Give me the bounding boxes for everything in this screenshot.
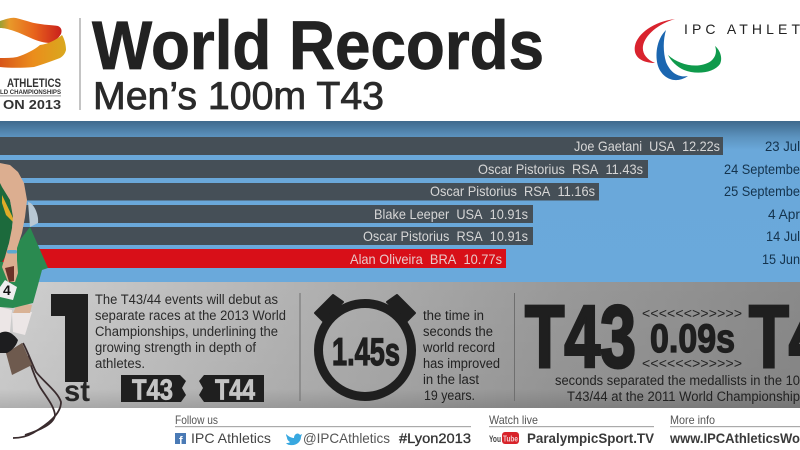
- text block: separate races at the 2013 World: [95, 308, 286, 323]
- twitter handle: @IPCAthletics: [303, 430, 390, 446]
- caption: [555, 373, 800, 404]
- text block: [95, 292, 286, 371]
- icon: red arc: [635, 19, 675, 63]
- jersey collar: [0, 163, 6, 168]
- text block: [422, 308, 500, 403]
- logo text: ATHLETICS: [7, 76, 61, 90]
- athlete photo: [0, 163, 61, 438]
- lower thigh: [13, 302, 32, 313]
- subtitle: Men’s 100m T43: [93, 75, 384, 118]
- text block: seconds the: [423, 324, 493, 339]
- url: ParalympicSport.TV: [527, 430, 655, 446]
- bar chart: world records: [0, 137, 800, 268]
- bar: Blake Leeper: Blake Leeper USA 10.91s: [374, 206, 528, 222]
- bar: Joe Gaetani: Joe Gaetani USA 12.22s: [574, 138, 720, 154]
- blade: [13, 343, 61, 438]
- label: Follow us: [175, 413, 218, 427]
- cloth: [28, 202, 38, 227]
- logo text: ON 2013: [3, 98, 61, 112]
- jersey stripe: [2, 195, 13, 222]
- big label T43: T43: [525, 287, 636, 386]
- bar: Blake Leeper: 4 Apr: [768, 206, 800, 222]
- header divider: [80, 18, 81, 110]
- label: More info: [670, 413, 715, 427]
- text block: growing strength in depth of: [95, 340, 256, 355]
- bar: Oscar Pistorius 11.43: [0, 160, 800, 178]
- text block: in the last: [423, 372, 479, 387]
- text block: athletes.: [95, 356, 145, 371]
- wristband: [7, 250, 17, 254]
- bar: Alan Oliveira (record): [0, 249, 800, 268]
- footer: follow us: [175, 413, 471, 447]
- knee joint: [0, 332, 18, 353]
- bar: Oscar Pistorius 10.91: Oscar Pistorius RSA 10.91s: [363, 228, 528, 244]
- hashtag: #Lyon2013: [399, 430, 471, 446]
- margin value: 0.09s: [650, 317, 735, 361]
- right sock: [12, 312, 32, 335]
- bar: Oscar Pistorius 10.91: [0, 227, 800, 245]
- bar: Joe Gaetani: [0, 137, 800, 155]
- badge: T44: T44: [215, 374, 255, 406]
- bar: Oscar Pistorius 11.16: Oscar Pistorius RSA 11.16s: [430, 183, 595, 199]
- title: World Records: [92, 7, 544, 84]
- text block: world record: [422, 340, 495, 355]
- shorts: [0, 227, 48, 308]
- panel: record bars background: [0, 121, 800, 282]
- IPC Athletics logo: [635, 19, 800, 80]
- icon: facebook: [175, 433, 186, 447]
- arrows bottom: <<<<<<>>>>>>: [642, 355, 742, 371]
- bar: Alan Oliveira (record): Alan Oliveira BRA 10.77s: [350, 251, 502, 267]
- icon: youtube: Tube: [503, 434, 518, 444]
- footer: more info: [669, 413, 800, 446]
- stopwatch value: 1.45s: [332, 331, 400, 374]
- facebook handle: IPC Athletics: [191, 430, 271, 446]
- bar: Oscar Pistorius 11.16: [0, 183, 800, 200]
- bib number: [0, 280, 17, 300]
- icon: blue arc: [657, 30, 688, 80]
- icon: youtube: [489, 432, 519, 444]
- big number 1: [51, 294, 88, 382]
- bib number: 4: [3, 282, 11, 298]
- icon: facebook: f: [179, 435, 183, 447]
- arrows top: <<<<<<>>>>>>: [642, 305, 742, 321]
- footer: watch live: [489, 413, 655, 446]
- icon: twitter bird: [286, 434, 302, 445]
- badge: T43: T43: [132, 374, 173, 406]
- icon: orange ribbon: [0, 18, 66, 68]
- text block: Championships, underlining the: [95, 324, 278, 339]
- fact divider: [514, 293, 515, 401]
- header: Lyon 2013 logo: [0, 18, 66, 112]
- icon: youtube: You: [489, 434, 501, 444]
- logo text: IPC ATHLET: [684, 21, 800, 37]
- text block: the time in: [423, 308, 484, 323]
- fact: first separate races: [51, 292, 286, 408]
- text block: 19 years.: [424, 388, 475, 403]
- fact: medal margin: [525, 287, 800, 404]
- text block: The T43/44 events will debut as: [95, 292, 278, 307]
- text block: has improved: [423, 356, 500, 371]
- arm: [0, 163, 27, 282]
- hand shadow: [5, 266, 14, 282]
- fact divider: [300, 293, 301, 401]
- st suffix: st: [64, 375, 90, 408]
- left sock: [0, 307, 12, 334]
- socket: [6, 343, 32, 375]
- icon: stopwatch: [315, 295, 415, 396]
- label: Watch live: [489, 413, 538, 427]
- logo text: [0, 76, 62, 112]
- bar: Blake Leeper: [0, 205, 800, 223]
- fact: time improvement: [315, 295, 500, 403]
- bar: Oscar Pistorius 11.43: Oscar Pistorius RSA 11.43s: [478, 161, 643, 177]
- logo text: LD CHAMPIONSHIPS: [0, 89, 62, 96]
- panel: facts background: [0, 282, 800, 408]
- jersey: [0, 183, 13, 262]
- icon: green arc: [668, 46, 721, 73]
